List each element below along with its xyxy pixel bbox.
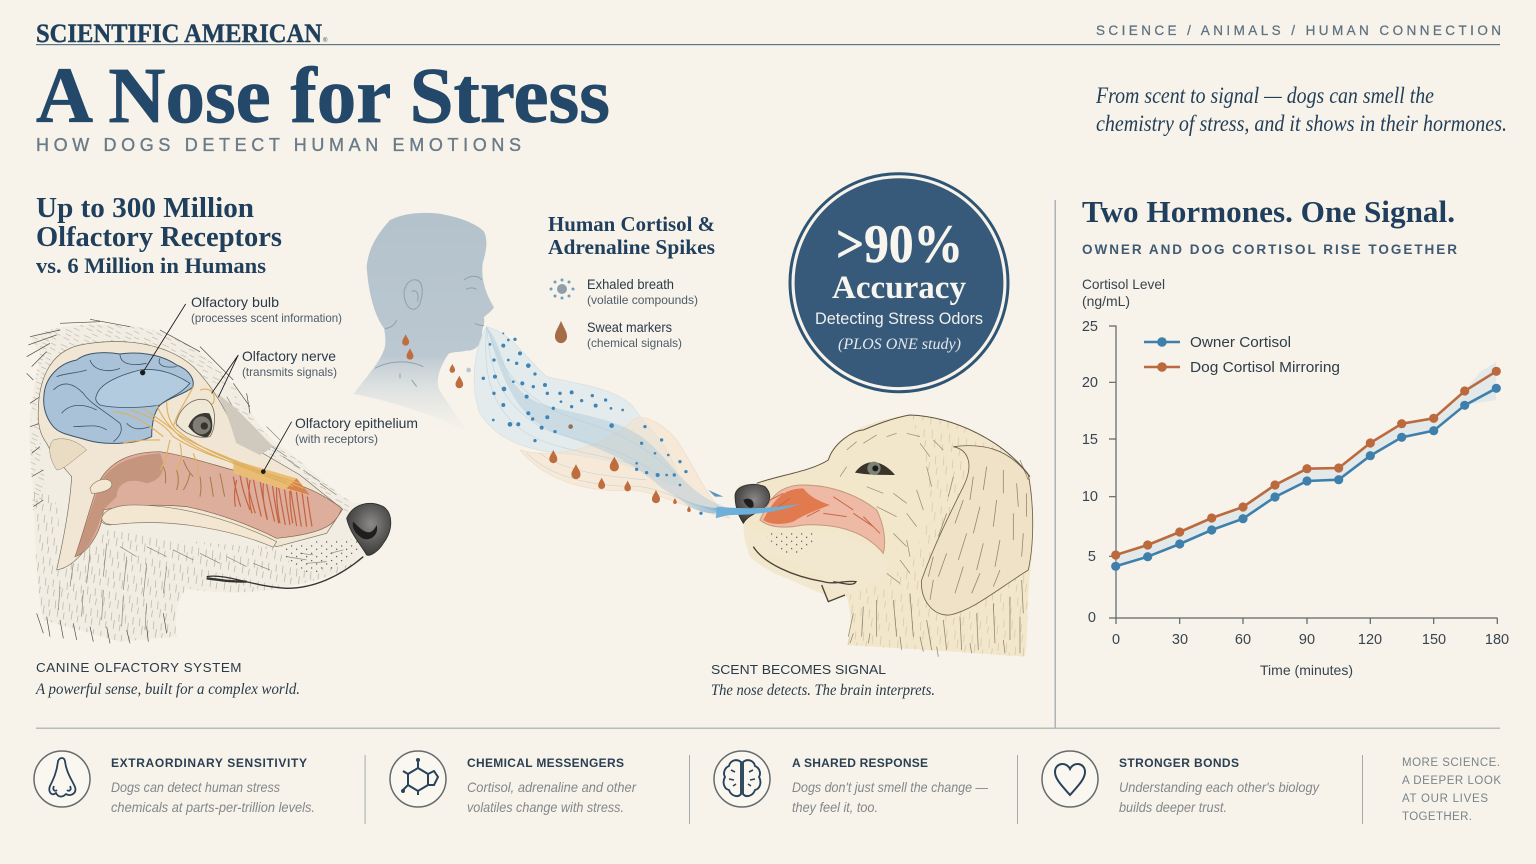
axes and ticks [1109, 326, 1498, 624]
y tick labels: 20 [1082, 375, 1098, 391]
head and neck fur [29, 324, 391, 642]
illustration: golden retriever head [716, 415, 1033, 657]
series: owner cortisol [1111, 384, 1501, 571]
illustration: human profile and scent plume [353, 213, 737, 518]
heading: human cortisol and adrenaline: Human Cortisol & [548, 212, 715, 236]
y tick labels: 0 [1088, 610, 1096, 626]
x tick labels: 90 [1299, 632, 1315, 648]
callouts: anatomy labels: (processes scent information) [191, 311, 342, 325]
y tick labels: 5 [1088, 549, 1096, 565]
closing note: AT OUR LIVES [1402, 793, 1488, 805]
intro text [1095, 83, 1507, 136]
footer item: chemical messengers [390, 751, 637, 815]
closing note: TOGETHER. [1402, 811, 1472, 823]
ear and face lines [375, 276, 484, 387]
stat badge: >90% accuracy: Accuracy [832, 270, 966, 306]
snout and throat hatching [58, 397, 343, 630]
footer item: a shared response [714, 751, 989, 815]
x tick labels: 60 [1235, 632, 1251, 648]
callouts: anatomy labels: Olfactory bulb [191, 294, 279, 310]
neck fur strokes [848, 580, 1023, 657]
stream arrows [708, 490, 732, 517]
whisker dots [280, 539, 360, 573]
mouth line [207, 557, 363, 588]
heading: olfactory receptors: Up to 300 Million [36, 193, 254, 224]
stat badge: >90% accuracy: Detecting Stress Odors [815, 310, 983, 328]
footer item: chemical messengers: Cortisol, adrenaline and other [467, 779, 637, 795]
volatile compound dots [482, 332, 703, 515]
fringe strokes [27, 319, 250, 643]
turbinate bone [102, 505, 277, 547]
eye [855, 462, 895, 475]
divider [365, 755, 366, 824]
heading: olfactory receptors: vs. 6 Million in Humans [36, 253, 266, 278]
pointer lines [143, 304, 292, 472]
footer item: extraordinary sensitivity: EXTRAORDINARY SENSITIVITY [111, 756, 307, 770]
eye [176, 399, 215, 437]
nasal cavity [75, 452, 342, 557]
heading: human cortisol and adrenaline [548, 212, 715, 259]
scent stream entering nose [716, 504, 800, 518]
chart legend: Dog Cortisol Mirroring [1190, 360, 1340, 376]
caption: scent becomes signal [711, 662, 935, 699]
icon: brain [714, 751, 770, 807]
head and neck [736, 415, 1033, 657]
x axis title: Time (minutes) [1260, 662, 1353, 678]
callouts: anatomy labels: (transmits signals) [242, 365, 337, 379]
chart legend: Owner Cortisol [1190, 335, 1291, 351]
x tick labels: 180 [1485, 632, 1509, 648]
column divider [1055, 200, 1056, 728]
masthead: Scientific American logo: ® [323, 37, 328, 44]
x tick labels: 150 [1422, 632, 1446, 648]
header rule [36, 44, 1500, 45]
y axis title [1082, 276, 1165, 309]
icon: molecule [390, 751, 446, 807]
ear [922, 446, 1033, 615]
icon: breath dots [550, 278, 574, 300]
footer item: stronger bonds: STRONGER BONDS [1119, 756, 1239, 770]
sweat drops [402, 334, 691, 512]
heading: olfactory receptors: Olfactory Receptors [36, 222, 282, 253]
legend: exhaled breath: (volatile compounds) [587, 293, 698, 307]
icon: sweat drop [555, 321, 567, 343]
y tick labels: 15 [1082, 432, 1098, 448]
footer item: stronger bonds: Understanding each other's biology [1119, 779, 1320, 795]
heading: olfactory receptors [36, 193, 282, 278]
caption: scent becomes signal: SCENT BECOMES SIGNAL [711, 662, 886, 677]
nose [347, 503, 391, 555]
footer item: stronger bonds [1042, 751, 1320, 815]
stat badge: >90% accuracy: (PLOS ONE study) [838, 336, 961, 353]
brain and bulb [44, 353, 193, 443]
footer item: a shared response: they feel it, too. [792, 799, 878, 815]
closing note: A DEEPER LOOK [1402, 775, 1501, 787]
divider [689, 755, 690, 824]
head fur strokes [840, 433, 943, 583]
divider [1017, 755, 1018, 824]
x tick labels: 0 [1112, 632, 1120, 648]
illustration: canine olfactory anatomy [27, 304, 391, 643]
legend: exhaled breath: Exhaled breath [587, 276, 674, 292]
title: A Nose for Stress [36, 53, 610, 140]
legend: sweat markers [555, 319, 682, 350]
divider [1362, 755, 1363, 824]
chart subheading: OWNER AND DOG CORTISOL RISE TOGETHER [1082, 242, 1457, 257]
series: dog cortisol [1111, 367, 1501, 560]
footer item: stronger bonds: builds deeper trust. [1119, 799, 1227, 815]
closing note [1402, 757, 1501, 823]
x tick labels [1112, 632, 1509, 648]
caption: canine olfactory system [35, 660, 300, 698]
caption: canine olfactory system: CANINE OLFACTORY SYSTEM [36, 660, 242, 675]
nose [735, 484, 770, 523]
breath contour lines [486, 327, 723, 515]
callouts: anatomy labels: Olfactory epithelium [295, 415, 418, 431]
footer item: a shared response: Dogs don't just smell the change — [792, 779, 989, 795]
legend: exhaled breath [550, 276, 698, 307]
muzzle [743, 523, 888, 595]
human silhouette [353, 213, 494, 432]
legend: sweat markers: Sweat markers [587, 319, 672, 335]
footer item: extraordinary sensitivity [34, 751, 315, 815]
footer item: chemical messengers: volatiles change with stress. [467, 799, 624, 815]
section breadcrumb: SCIENCE / ANIMALS / HUMAN CONNECTION [1096, 23, 1501, 38]
y axis title: Cortisol Level [1082, 276, 1165, 292]
nasal cavity [760, 485, 885, 553]
scent current [487, 327, 737, 511]
line chart: cortisol over time [1082, 276, 1509, 678]
intro text: From scent to signal — dogs can smell the [1095, 83, 1434, 108]
x tick labels: 120 [1358, 632, 1382, 648]
footer rule [36, 728, 1500, 729]
y tick labels: 25 [1082, 319, 1098, 335]
icon: heart [1042, 751, 1098, 807]
callouts: anatomy labels [191, 294, 418, 446]
legend: sweat markers: (chemical signals) [587, 336, 682, 350]
callouts: anatomy labels: (with receptors) [295, 432, 378, 446]
chart legend [1144, 335, 1340, 376]
y tick labels [1082, 319, 1098, 626]
skull bones [38, 342, 343, 570]
orange sweat plume [520, 417, 730, 518]
confidence band [1116, 362, 1496, 566]
x tick labels: 30 [1172, 632, 1188, 648]
olfactory nerve bundle [233, 460, 310, 495]
heading: two hormones: Two Hormones. One Signal. [1082, 194, 1455, 229]
stat badge: >90% accuracy [790, 174, 1008, 392]
footer item: extraordinary sensitivity: chemicals at parts-per-trillion levels. [111, 799, 315, 815]
blue breath plume [474, 327, 678, 485]
subtitle: HOW DOGS DETECT HUMAN EMOTIONS [36, 135, 521, 155]
masthead: Scientific American logo: SCIENTIFIC AMERICAN [36, 19, 322, 48]
footer item: extraordinary sensitivity: Dogs can detect human stress [111, 779, 280, 795]
olfactory receptors fronds [233, 475, 312, 527]
footer item: a shared response: A SHARED RESPONSE [792, 756, 928, 770]
closing note: MORE SCIENCE. [1402, 757, 1500, 769]
heading: human cortisol and adrenaline: Adrenaline Spikes [548, 235, 715, 259]
footer item: chemical messengers: CHEMICAL MESSENGERS [467, 756, 624, 770]
y tick labels: 10 [1082, 489, 1098, 505]
y axis title: (ng/mL) [1082, 293, 1130, 309]
callouts: anatomy labels: Olfactory nerve [242, 348, 336, 364]
icon: nose [34, 751, 90, 807]
caption: canine olfactory system: A powerful sense, built for a complex world. [35, 681, 300, 698]
caption: scent becomes signal: The nose detects. The brain interprets. [711, 682, 935, 699]
stat badge: >90% accuracy: >90% [836, 214, 963, 274]
